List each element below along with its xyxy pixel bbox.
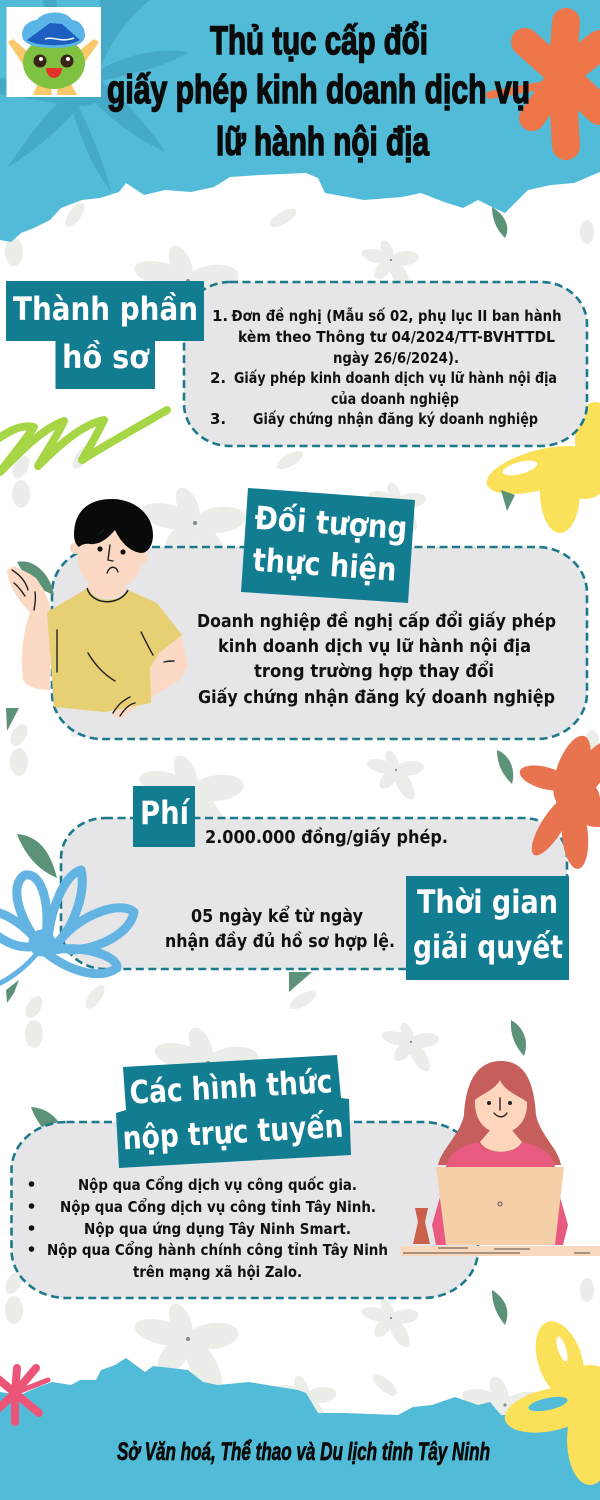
document list: kèm theo Thông tư 04/2024/TT-BVHTTDL: [238, 328, 555, 346]
top torn blue band: [0, 0, 600, 242]
document list: của doanh nghiệp: [331, 390, 459, 408]
leaf behind hand: [17, 561, 54, 595]
decorative orange flower: [517, 731, 600, 870]
title: [107, 19, 530, 164]
eyes and mouth: [97, 530, 126, 573]
laptop: [436, 1167, 564, 1245]
heading box: [116, 1055, 351, 1168]
desk: [401, 1246, 600, 1256]
heading text: [13, 290, 198, 376]
heading box: [241, 488, 415, 603]
submission methods list: [29, 1175, 388, 1281]
processing time text: 05 ngày kể từ ngày: [191, 905, 363, 927]
heading text: hồ sơ: [62, 338, 150, 376]
submission methods list: Nộp qua Cổng dịch vụ công tỉnh Tây Ninh.: [60, 1197, 376, 1216]
processing time text: nhận đầy đủ hồ sơ hợp lệ.: [165, 931, 395, 952]
title: lữ hành nội địa: [216, 120, 430, 164]
clothing lines: [12, 570, 174, 716]
document list: ngày 26/6/2024).: [333, 349, 459, 367]
heading text: Thời gian giải quyết: giải quyết: [413, 928, 563, 966]
hair: [438, 1061, 561, 1165]
decorative yellow flower bottom right: [501, 1315, 600, 1485]
document list: 1.: [212, 307, 228, 325]
heading text: [122, 1062, 344, 1157]
heading text: Thời gian giải quyết: [413, 883, 563, 966]
vase: [413, 1208, 430, 1244]
right arm: [112, 635, 188, 718]
description text: Giấy chứng nhận đăng ký doanh nghiệp: [198, 687, 555, 708]
shirt: [446, 1142, 555, 1167]
description text: kinh doanh dịch vụ lữ hành nội địa: [218, 636, 531, 657]
illustration: woman with laptop: [401, 1061, 600, 1256]
panel box: [12, 1122, 478, 1298]
description text: [197, 610, 556, 708]
illustration: boy with yellow shirt: [7, 499, 188, 718]
decorative leaf: [31, 1107, 62, 1132]
panel box: [52, 547, 587, 739]
face and neck: [475, 1080, 527, 1133]
fee text: 2.000.000 đồng/giấy phép.: [205, 827, 448, 848]
facial features: [487, 1098, 512, 1117]
submission methods list: Nộp qua Cổng hành chính công tỉnh Tây Ninh: [47, 1240, 388, 1259]
heading box: Thời gian giải quyết: [406, 876, 569, 980]
processing time text: [165, 905, 395, 952]
panel: Các hình thức nộp trực tuyến: [12, 1055, 478, 1298]
document list: [210, 306, 562, 428]
submission methods list: Nộp qua ứng dụng Tây Ninh Smart.: [84, 1220, 351, 1238]
decorative leaves: [6, 207, 526, 1325]
decorative pink flower: [0, 1368, 48, 1422]
description text: Doanh nghiệp đề nghị cấp đổi giấy phép: [197, 610, 556, 632]
panel box: [61, 818, 567, 969]
leaf near yellow flower: [501, 490, 515, 511]
left arm and hand: [7, 566, 50, 690]
neck: [88, 570, 126, 598]
submission methods list: trên mạng xã hội Zalo.: [133, 1263, 302, 1281]
heading box: Phí: [133, 786, 195, 847]
decorative blue flower: [0, 870, 134, 985]
document list: Đơn đề nghị (Mẫu số 02, phụ lục II ban hành: [232, 306, 562, 325]
shirt: [47, 588, 182, 712]
submission methods list: Nộp qua Cổng dịch vụ công quốc gia.: [78, 1175, 357, 1194]
decorative leaf: [17, 834, 57, 878]
logo: [6, 7, 101, 97]
bottom torn blue band: [0, 1358, 600, 1500]
decorative orange flower top right: [490, 22, 600, 146]
title: Thủ tục cấp đổi: [210, 19, 428, 63]
heading text: Phí: Phí: [140, 794, 191, 832]
decorative darker blue starburst: [0, 0, 189, 192]
heading text: [250, 499, 409, 589]
description text: trong trường hợp thay đổi: [254, 660, 494, 682]
decorative yellow flower right: [482, 402, 600, 533]
heading text: Đối tượng: [253, 499, 409, 547]
hair: [74, 499, 153, 553]
heading text: thực hiện: [251, 541, 398, 589]
heading box: [6, 281, 204, 389]
document list: Giấy chứng nhận đăng ký doanh nghiệp: [253, 410, 538, 428]
heading text: nộp trực tuyến: [122, 1107, 344, 1157]
sleeves: [432, 1190, 450, 1245]
decorative green squiggle: [0, 410, 167, 472]
panel box: [184, 282, 587, 446]
heading text: Các hình thức: [128, 1062, 333, 1112]
panel: Thành phần hồ sơ: [6, 281, 587, 446]
heading text: Thành phần: [13, 290, 198, 328]
face: [78, 526, 142, 590]
document list: 3.: [210, 410, 226, 428]
panel: Đối tượng thực hiện: [52, 488, 587, 739]
heading text: Thời gian giải quyết: Thời gian: [417, 883, 558, 921]
panel: Phí và Thời gian giải quyết: [61, 786, 569, 980]
document list: 2.: [210, 369, 226, 387]
